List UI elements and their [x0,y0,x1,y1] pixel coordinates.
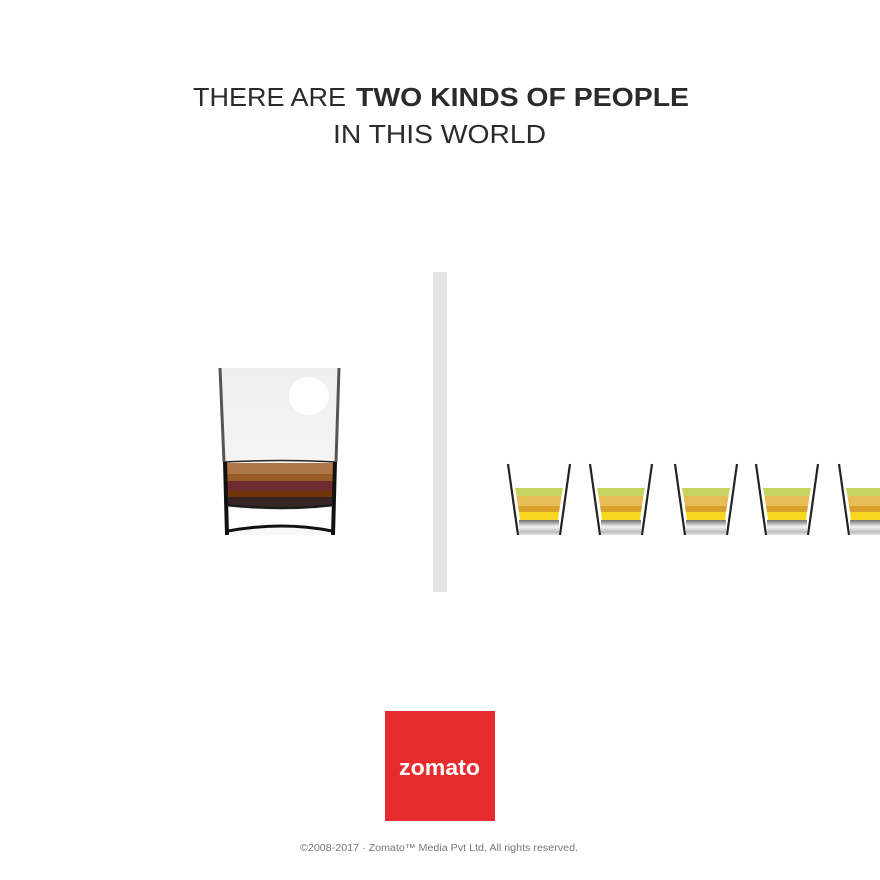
title: THERE ARE [193,82,346,112]
logo: zomato [399,755,480,780]
icon: shot glass 5 [839,464,880,535]
divider [433,272,447,592]
icon: shot glass 1 [508,464,570,535]
logo [385,711,495,821]
icon: shot glass 4 [756,464,818,535]
icon: large whisky glass [220,368,339,535]
icon: shot glass 2 [590,464,652,535]
copyright: ©2008-2017 · Zomato™ Media Pvt Ltd. All rights reserved. [300,843,578,854]
title: TWO KINDS OF PEOPLE [356,82,689,112]
title: IN THIS WORLD [333,119,546,149]
icon: shot glass 3 [675,464,737,535]
title [193,82,689,149]
